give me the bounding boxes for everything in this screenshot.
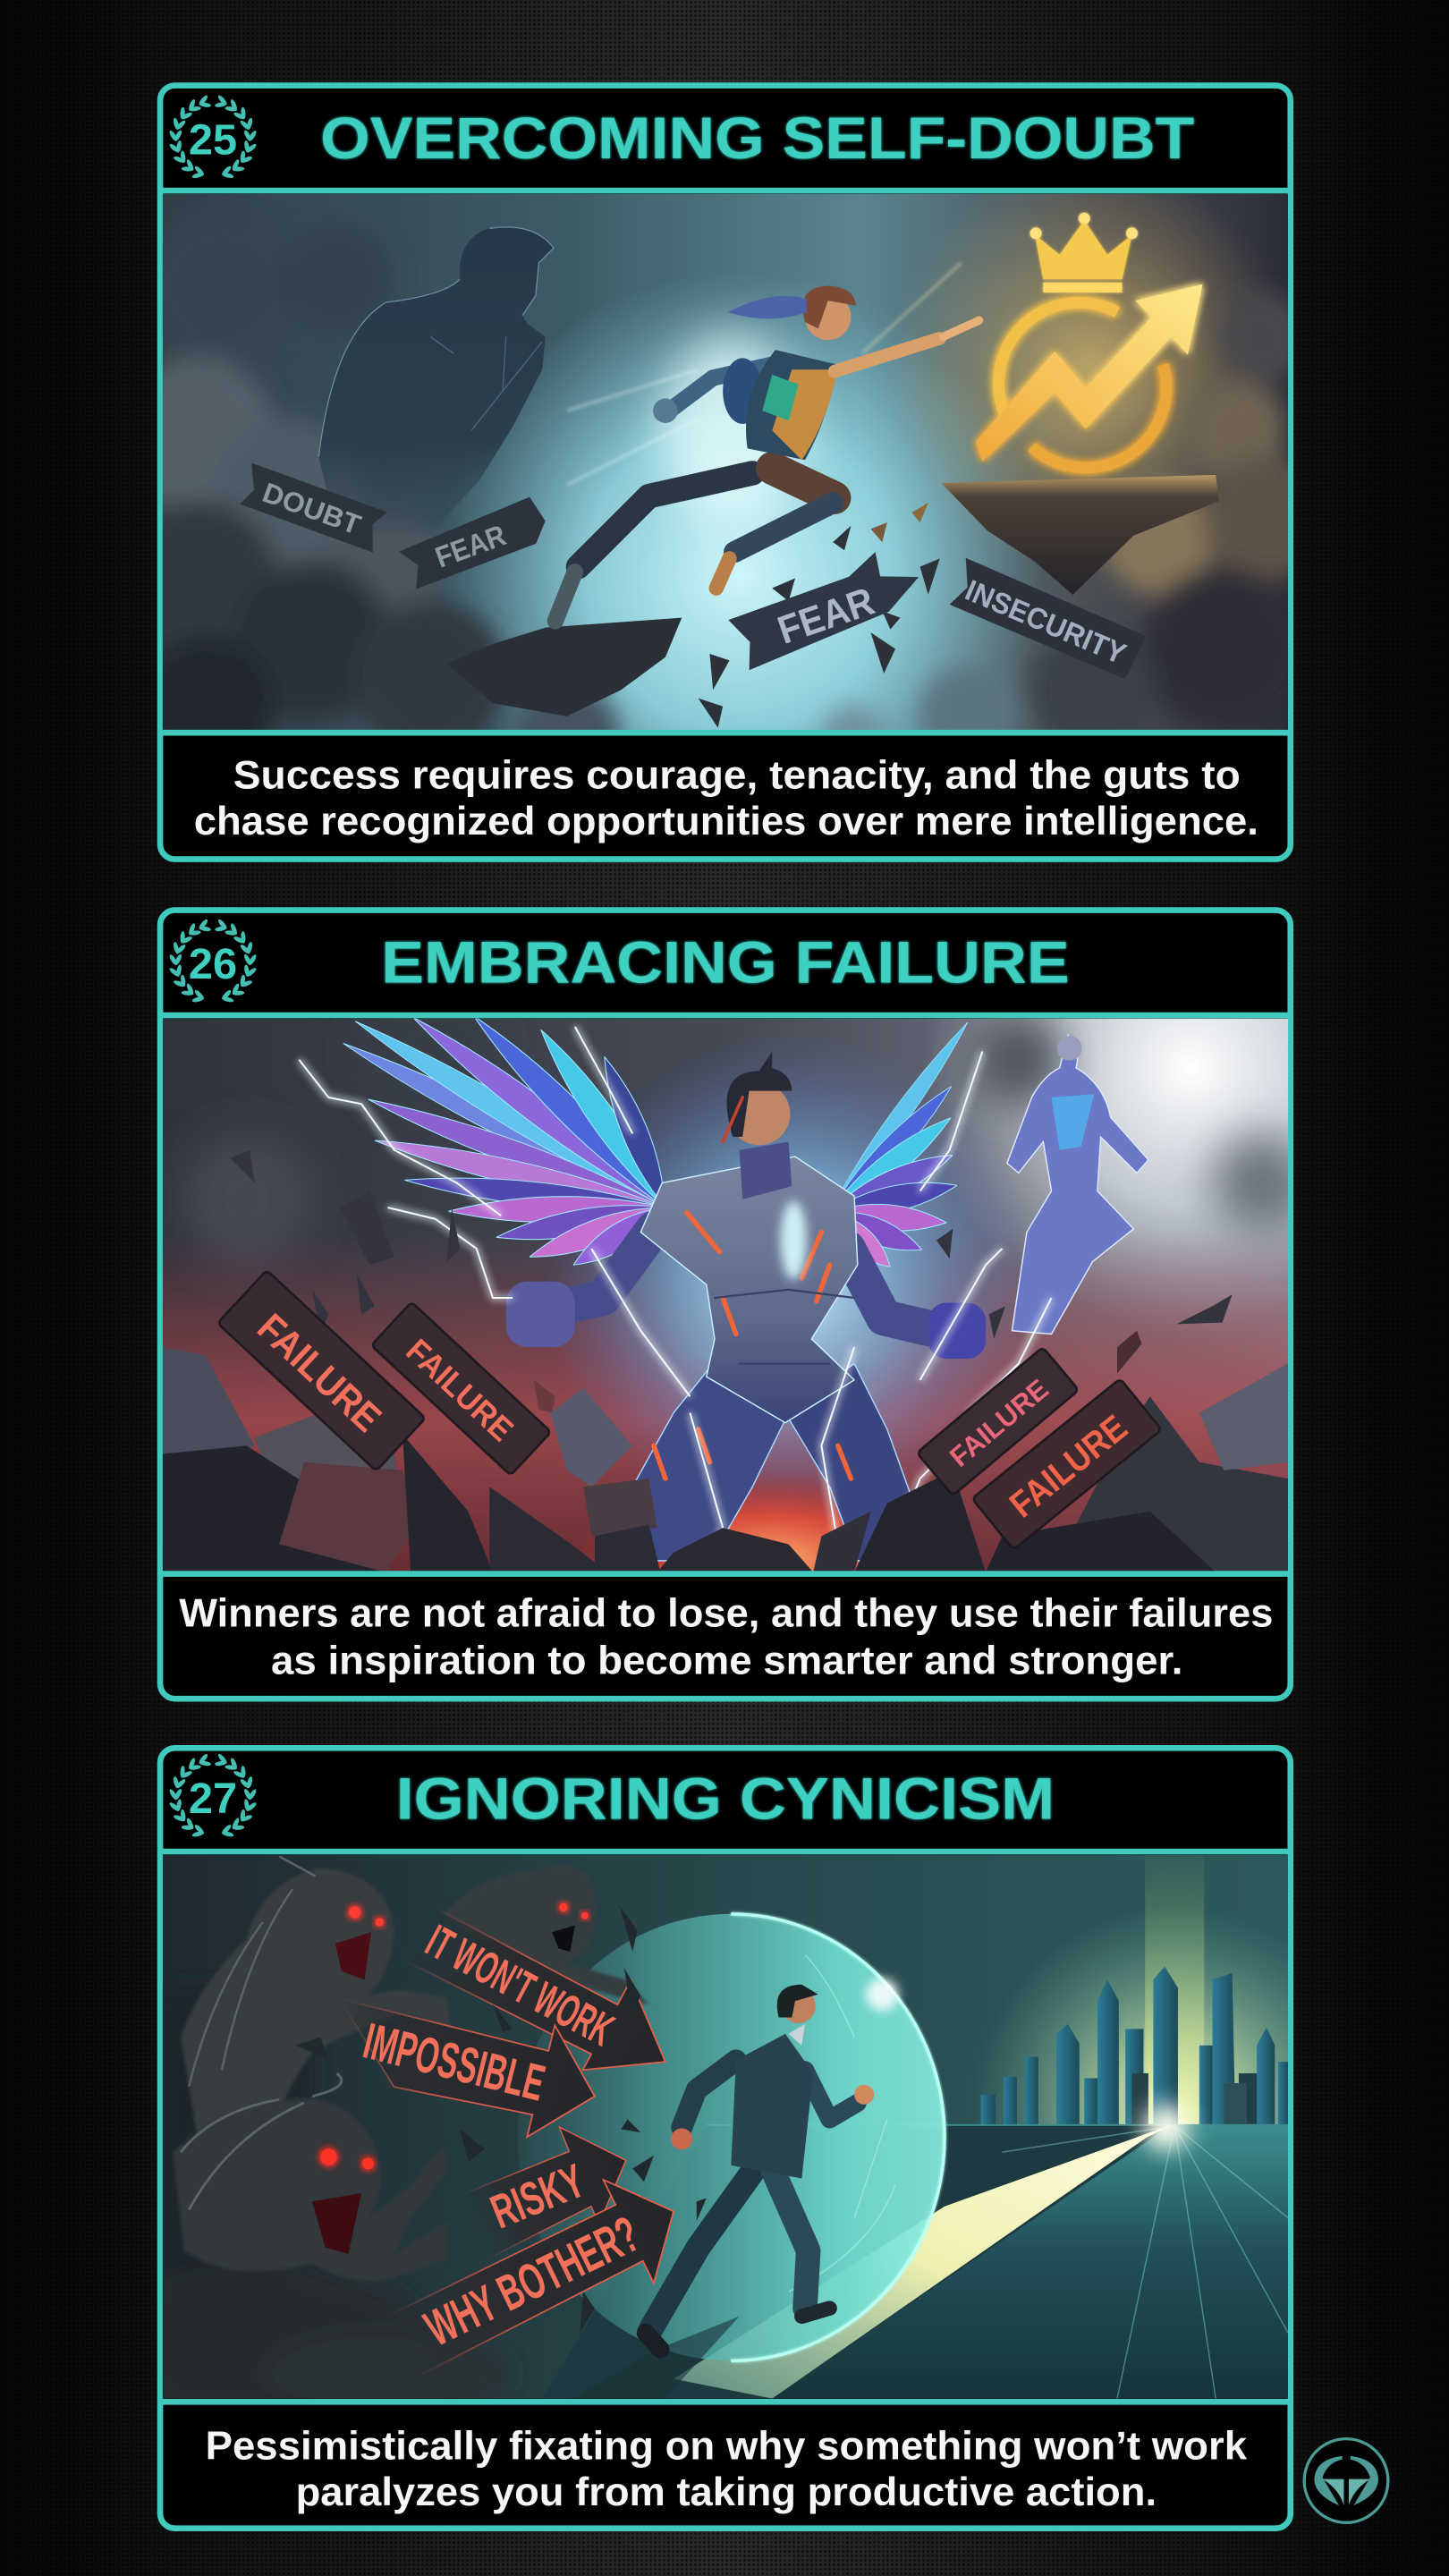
horizon glow xyxy=(970,1906,1380,2317)
card frame xyxy=(160,911,1291,1699)
failure sign 2 xyxy=(371,1302,551,1475)
illustration: runner leaping from doubt to success xyxy=(163,193,1288,730)
flying future self xyxy=(1007,1035,1148,1334)
arrow: why bother: WHY BOTHER? xyxy=(417,2206,648,2358)
failure sign 2: FAILURE xyxy=(399,1332,521,1448)
laurel badge 25 xyxy=(168,94,258,179)
failure sign 1: FAILURE xyxy=(249,1306,389,1441)
banner: doubt: DOUBT xyxy=(258,477,365,541)
arrow: impossible: IMPOSSIBLE xyxy=(358,2012,550,2113)
rising hero xyxy=(506,1052,986,1561)
title: EMBRACING FAILURE xyxy=(381,929,1070,996)
failure sign 1 xyxy=(217,1270,426,1471)
banner: doubt xyxy=(237,462,387,553)
rock rubble left xyxy=(163,1347,657,1572)
yellow light path xyxy=(674,2124,1173,2399)
ground xyxy=(707,2124,1288,2399)
laurel badge 26 xyxy=(168,919,258,1003)
banner: insecurity: INSECURITY xyxy=(961,574,1131,671)
man shadow xyxy=(558,2317,740,2407)
right wing xyxy=(821,1017,975,1276)
running businessman xyxy=(646,1985,874,2350)
arrow: impossible xyxy=(318,1973,609,2150)
dividers xyxy=(161,1852,1290,2402)
panel: ignoring cynicism xyxy=(98,1748,1380,2529)
failure sign 3: FAILURE xyxy=(944,1373,1055,1473)
caption: Pessimistically fixating on why something won’t work xyxy=(206,2425,1248,2469)
runner figure xyxy=(555,286,979,621)
illustration: winged hero rising from failure xyxy=(163,797,1449,1651)
golden crown xyxy=(1030,213,1138,292)
chest glow xyxy=(780,1201,807,1280)
left wing xyxy=(338,1007,677,1275)
cracked cliff under runner xyxy=(447,618,682,716)
ghost of doubt 1 xyxy=(181,1857,452,2185)
title: OVERCOMING SELF-DOUBT xyxy=(320,106,1194,172)
distant city skyline xyxy=(981,1967,1288,2124)
laurel badge 25: 25 xyxy=(189,117,237,165)
heading xyxy=(161,94,1290,733)
storm clouds xyxy=(181,986,1311,1265)
arrow: risky: RISKY xyxy=(484,2155,592,2239)
laurel badge 27: 27 xyxy=(189,1775,237,1823)
icon: corner logo xyxy=(1304,2439,1388,2522)
heading xyxy=(161,919,1290,1574)
header divider and caption divider xyxy=(161,191,1290,733)
title: IGNORING CYNICISM xyxy=(396,1766,1055,1832)
floating rock fragments xyxy=(699,503,940,728)
caption: Winners are not afraid to lose, and they use their failures xyxy=(179,1591,1273,1635)
laurel badge 27 xyxy=(168,1753,258,1838)
right storm clouds xyxy=(814,292,1288,730)
flying rock debris xyxy=(230,1150,1233,1413)
ghost of doubt 2 xyxy=(444,1865,649,2004)
caption: chase recognized opportunities over mere intelligence. xyxy=(194,800,1258,843)
card frame xyxy=(160,1748,1291,2529)
caption: Success requires courage, tenacity, and the guts to xyxy=(233,754,1241,798)
caption xyxy=(179,1591,1273,1683)
shadow of self-doubt figure xyxy=(318,227,554,534)
vertical light pillar xyxy=(1145,1855,1204,2126)
arrow: it won't work: IT WON'T WORK xyxy=(418,1914,623,2055)
failure sign 3 xyxy=(917,1347,1079,1496)
laurel badge 26: 26 xyxy=(189,941,237,988)
left storm clouds xyxy=(163,231,633,730)
road perspective lines xyxy=(970,2126,1288,2399)
rising success arrow in ring xyxy=(976,284,1202,468)
arrow: risky xyxy=(453,2108,644,2267)
lightning xyxy=(299,1027,1052,1561)
arrow: why bother xyxy=(375,2158,698,2394)
rock rubble right xyxy=(595,1363,1288,1572)
failure sign 4 xyxy=(972,1378,1162,1550)
caption xyxy=(206,2425,1248,2514)
banner: fear right: FEAR xyxy=(773,580,880,653)
caption xyxy=(194,754,1258,843)
banner: fear right xyxy=(723,541,929,671)
left smoke mass xyxy=(98,1987,509,2420)
dividers xyxy=(161,1015,1290,1574)
shield shards xyxy=(296,1906,707,2333)
panel: embracing failure xyxy=(160,797,1449,1699)
illustration: man running in a shield past negative voices xyxy=(98,1855,1380,2420)
heading xyxy=(161,1753,1290,2402)
light streaks xyxy=(567,263,961,485)
caption: paralyzes you from taking productive action. xyxy=(296,2470,1157,2514)
failure sign 4: FAILURE xyxy=(1002,1406,1135,1525)
glowing shield bubble xyxy=(518,1914,945,2360)
banner: fear left xyxy=(397,495,552,590)
card frame xyxy=(160,86,1291,860)
panel: overcoming self-doubt xyxy=(115,86,1327,879)
arrow: it won't work xyxy=(397,1881,691,2103)
goal cliff xyxy=(941,475,1219,595)
ghost of doubt 3 xyxy=(173,2073,447,2282)
caption: as inspiration to become smarter and stronger. xyxy=(271,1640,1182,1683)
banner: fear left: FEAR xyxy=(431,519,511,575)
